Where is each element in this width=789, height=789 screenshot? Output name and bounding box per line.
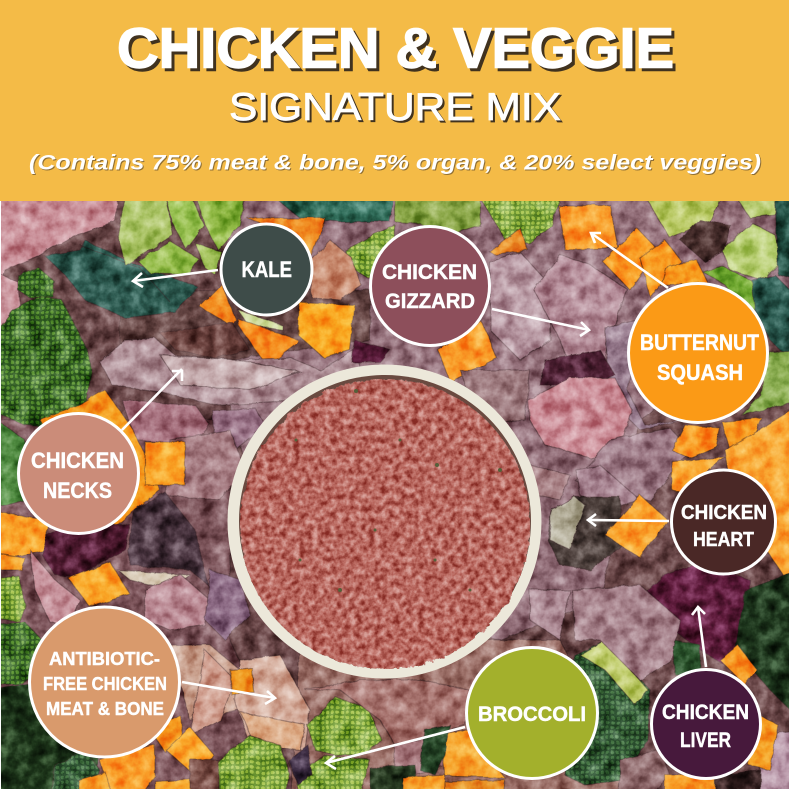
squash bottom left <box>156 715 183 754</box>
food photo collage <box>0 180 789 789</box>
right meat chunks <box>575 428 690 500</box>
badge: chicken heart <box>672 470 776 574</box>
peach meat <box>310 240 361 300</box>
shredded pink meat <box>528 378 632 458</box>
badge: kale <box>221 224 312 315</box>
badge: butternut squash <box>628 284 768 422</box>
arrow: chicken necks <box>122 369 182 430</box>
badge: chicken liver: LIVER <box>680 729 731 752</box>
kale and squash bottom centre <box>370 765 420 789</box>
squash upper right <box>558 205 618 250</box>
subtitle: SIGNATURE MIX <box>229 86 561 129</box>
badge: butternut squash: SQUASH <box>657 360 743 385</box>
badge: antibiotic-free chicken meat and bone: ANTIBIOTIC- <box>49 648 160 669</box>
meat under bowl <box>305 680 470 745</box>
squash right <box>672 425 720 458</box>
badge: antibiotic-free chicken meat and bone: MEAT & BONE <box>46 698 164 719</box>
liver and heart left <box>42 520 130 577</box>
white edge <box>0 201 1 789</box>
badge: chicken necks: NECKS <box>43 478 112 503</box>
badge: chicken liver <box>652 670 760 778</box>
squash lower right <box>720 645 757 685</box>
badge: butternut squash: BUTTERNUT <box>640 330 759 355</box>
badge: chicken gizzard: CHICKEN <box>382 261 477 284</box>
butternut squash around necks <box>40 390 160 530</box>
badge: chicken liver: CHICKEN <box>662 701 749 724</box>
badge: kale: KALE <box>242 257 292 282</box>
gizzard meat <box>490 252 550 360</box>
chicken liver <box>638 562 750 665</box>
badge: chicken gizzard <box>370 226 490 346</box>
subtitle: SIGNATURE MIX <box>231 88 563 131</box>
arrow: chicken meat and bone <box>182 682 275 704</box>
peas and dark kale right <box>703 266 762 310</box>
broccoli and greens left edge <box>1 422 26 506</box>
title: CHICKEN & VEGGIE <box>120 20 677 84</box>
chicken heart <box>548 497 622 570</box>
arrow: butternut squash <box>591 233 668 288</box>
badge: chicken heart: CHICKEN <box>681 502 767 524</box>
kale leaf <box>45 240 198 318</box>
arrow: broccoli <box>326 727 465 769</box>
dark kale lower right <box>735 570 789 720</box>
bowl food: ground mix <box>240 379 530 669</box>
badge: broccoli: BROCCOLI <box>478 703 586 726</box>
title: CHICKEN & VEGGIE <box>117 16 674 80</box>
broccoli lower left <box>0 575 26 622</box>
bowl <box>228 364 542 678</box>
broccoli left <box>0 295 92 428</box>
kale and broccoli top <box>278 201 394 224</box>
badge: antibiotic-free chicken meat and bone <box>30 607 180 757</box>
arrow: chicken liver <box>692 607 706 667</box>
badge: chicken necks <box>18 414 138 534</box>
header band <box>0 0 789 201</box>
badge: chicken necks: CHICKEN <box>31 448 124 473</box>
lower left meat <box>170 645 240 720</box>
big butternut piece <box>724 411 789 576</box>
badge: antibiotic-free chicken meat and bone: FREE CHICKEN <box>43 673 167 694</box>
bowl inner shadow <box>239 375 531 667</box>
chicken neck <box>100 338 360 405</box>
herb flecks <box>294 389 502 592</box>
squash cube beside heart <box>605 495 668 558</box>
broccoli lower right <box>565 640 650 785</box>
broccoli bottom <box>218 736 290 789</box>
badge: chicken heart: HEART <box>693 529 754 551</box>
meat pieces left of bowl <box>122 400 210 445</box>
badge: chicken gizzard: GIZZARD <box>385 290 475 313</box>
composition note: (Contains 75% meat & bone, 5% organ, & 20% select veggies) <box>30 152 762 176</box>
composition note: (Contains 75% meat & bone, 5% organ, & 20% select veggies) <box>29 152 761 174</box>
arrow: kale <box>133 270 218 287</box>
arrow: chicken gizzard <box>492 309 589 336</box>
green vegetable cubes <box>118 195 173 265</box>
lower right meat <box>572 585 680 680</box>
butternut squash cubes upper left <box>200 285 236 326</box>
arrow: chicken heart <box>588 514 669 526</box>
green top right <box>648 201 720 238</box>
ground meat top left <box>1 201 118 275</box>
badge: broccoli <box>466 648 598 778</box>
